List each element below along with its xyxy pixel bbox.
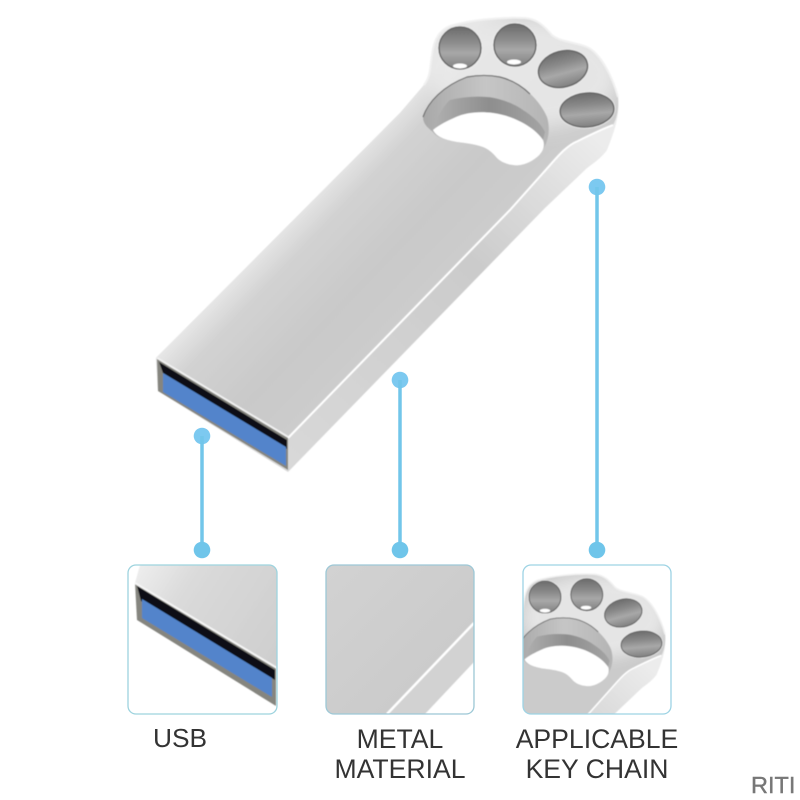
connector: metal material <box>392 372 408 558</box>
paw pad opening <box>423 76 549 165</box>
connector: USB <box>194 428 210 558</box>
drive body <box>156 18 620 472</box>
label: applicable key chain: KEY CHAIN <box>526 754 668 784</box>
panel: USB detail <box>128 565 277 714</box>
USB port <box>157 359 288 470</box>
panel: metal material detail <box>326 565 474 714</box>
main product: paw USB flash drive <box>156 18 620 472</box>
connector: key chain <box>589 179 605 558</box>
paw toe holes <box>438 22 617 131</box>
label: USB: USB <box>153 723 207 753</box>
watermark: RITI: RITI <box>751 772 795 798</box>
label: metal material: MATERIAL <box>334 754 466 784</box>
panel: key chain detail <box>522 564 672 715</box>
label: applicable key chain: APPLICABLE <box>516 724 678 754</box>
label: metal material: METAL <box>357 724 443 754</box>
